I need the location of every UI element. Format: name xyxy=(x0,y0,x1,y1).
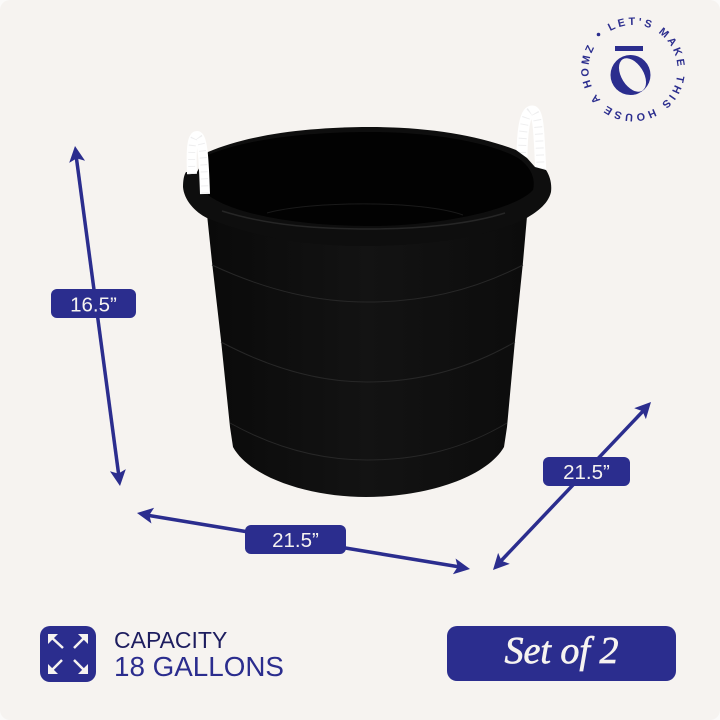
rim highlight xyxy=(222,211,505,229)
label: front 21.5: 21.5” xyxy=(272,529,319,552)
icon: left rope handle xyxy=(192,136,205,194)
separator dot xyxy=(597,33,600,36)
arrow: front width xyxy=(136,505,471,577)
arrow: height xyxy=(67,145,128,487)
bucket xyxy=(183,111,551,497)
capacity label: CAPACITY xyxy=(114,627,227,653)
badge: set of 2 xyxy=(447,626,676,681)
label: front 21.5 xyxy=(245,525,346,554)
label: 16.5 xyxy=(51,289,136,318)
dimension: height 16.5 xyxy=(51,145,136,487)
inner bottom edge xyxy=(267,204,463,215)
dimension: width front xyxy=(136,505,471,577)
label: side 21.5: 21.5” xyxy=(563,461,610,484)
icon: expand arrows xyxy=(40,626,96,682)
bucket body xyxy=(206,205,528,497)
badge: set of 2: Set of 2 xyxy=(505,630,618,672)
arrow: side width xyxy=(487,397,657,575)
logo bar xyxy=(615,46,643,51)
body ribs xyxy=(212,265,523,460)
label: 16.5: 16.5” xyxy=(70,294,117,316)
bucket rim xyxy=(183,127,551,246)
capacity block xyxy=(40,626,284,682)
icon: right rope handle xyxy=(522,111,541,176)
circular slogan: LET'S MAKE THIS HOUSE A HOMZ xyxy=(581,17,685,122)
label: side 21.5 xyxy=(543,457,630,486)
dimension: width side xyxy=(487,397,657,575)
bucket interior xyxy=(208,132,534,226)
logo ring mark xyxy=(610,53,652,97)
capacity value: 18 GALLONS xyxy=(114,651,284,682)
brand logo xyxy=(581,17,685,122)
